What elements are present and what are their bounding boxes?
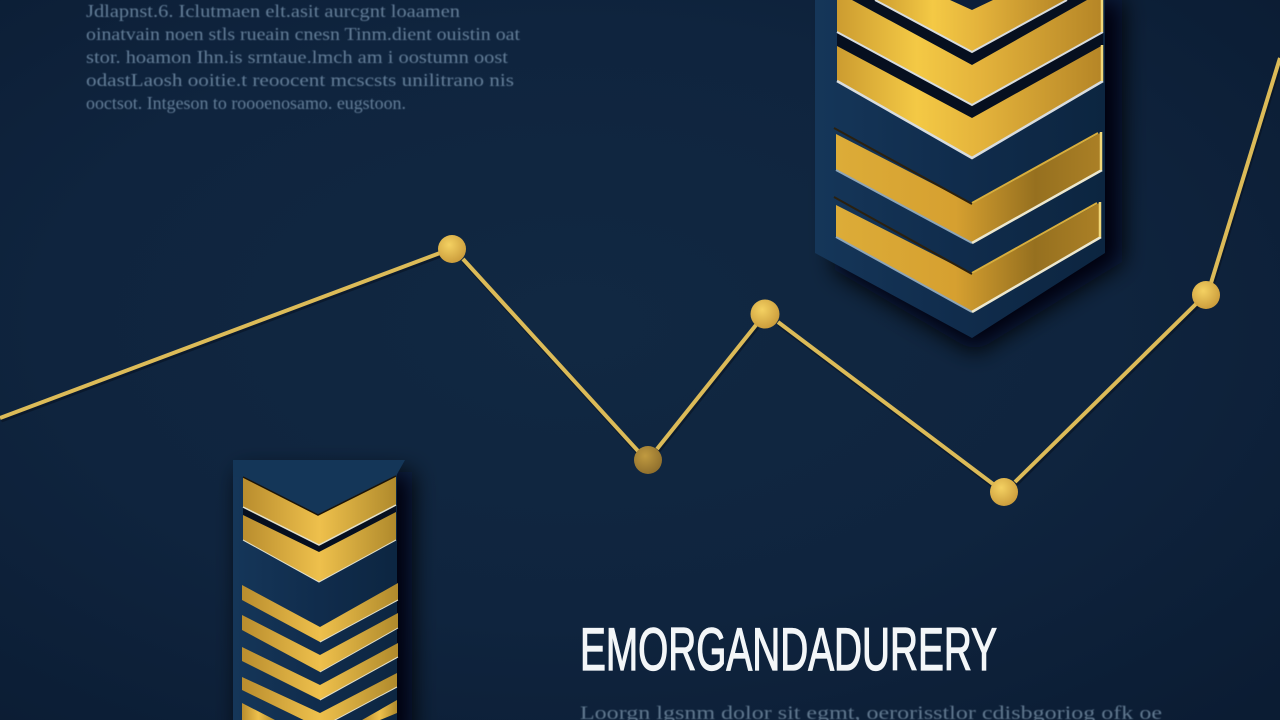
- text block: top left paragraph: [86, 1, 520, 113]
- small chevron badge: [233, 460, 412, 720]
- dark gap: middle chevrons: [837, 30, 1103, 120]
- small badge top cap: [233, 460, 405, 515]
- text block: top left paragraph: oinatvain noen stls rueain cnesn Tinm.dient ouistin oat: [86, 24, 520, 44]
- small chevron 1: [243, 476, 396, 545]
- small badge shadow: [240, 472, 412, 720]
- data point 1: [438, 235, 466, 263]
- chevron 2: [837, 0, 1103, 105]
- small chevron 5: [242, 643, 398, 700]
- heading: EMORGANDADURERY: [580, 616, 997, 683]
- small badge body: [233, 460, 405, 720]
- badge shadow: [835, 0, 1122, 352]
- text block: top left paragraph: stor. hoamon Ihn.is srntaue.lmch am i oostumn oost: [86, 47, 508, 67]
- data point 3: [750, 300, 780, 328]
- dark gap: upper chevrons: [852, 0, 1087, 65]
- small chevron 6: [242, 673, 397, 720]
- text block: top left paragraph: odastLaosh ooitie.t reoocent mcscsts unilitrano nis: [86, 70, 514, 90]
- chevron 5: [834, 197, 1101, 312]
- line chart: [0, 58, 1280, 506]
- small chevron 4: [242, 613, 398, 672]
- data point 4: [990, 478, 1018, 506]
- small badge dark gap: [243, 503, 396, 556]
- badge body: [815, 0, 1105, 338]
- data point 2: [634, 446, 662, 474]
- trend line: [0, 58, 1280, 484]
- data point 5: [1192, 281, 1220, 309]
- text block: top left paragraph: Jdlapnst.6. Iclutmaen elt.asit aurcgnt loaamen: [86, 1, 460, 21]
- trend line shadow: [1, 60, 1280, 486]
- chevron 3: [837, 45, 1103, 158]
- chevron 1: [875, 0, 1067, 52]
- text block: top left paragraph: ooctsot. Intgeson to roooenosamo. eugstoon.: [86, 93, 406, 113]
- small chevron 2: [243, 512, 396, 582]
- small chevron 7: [242, 700, 397, 720]
- large chevron badge: [815, 0, 1122, 352]
- chevron notch: [950, 0, 993, 10]
- small chevron 3: [242, 583, 398, 642]
- chevron 4: [834, 128, 1102, 243]
